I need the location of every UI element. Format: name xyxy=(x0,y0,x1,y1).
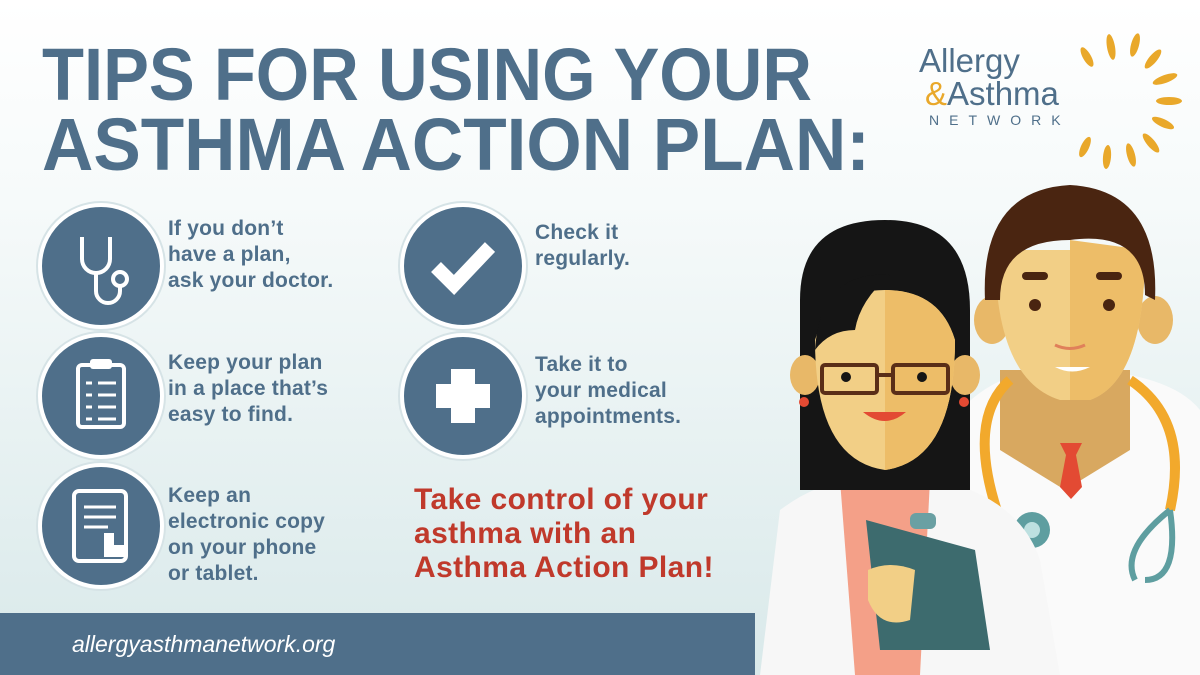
title: TIPS FOR USING YOUR xyxy=(42,33,812,116)
tip 1: ask your doctor. xyxy=(168,269,333,292)
tip 1 xyxy=(168,217,333,292)
woman xyxy=(760,220,1060,675)
tip 2: easy to find. xyxy=(168,403,293,426)
tip 2: in a place that’s xyxy=(168,377,328,400)
icon: tablet xyxy=(38,463,164,589)
tip 3: on your phone xyxy=(168,536,316,559)
tip 5 xyxy=(535,353,681,428)
tip 5: Take it to xyxy=(535,353,628,376)
logo: &Asthma xyxy=(925,75,1060,112)
tip 3: or tablet. xyxy=(168,562,259,585)
tip 2: Keep your plan xyxy=(168,351,322,374)
icon: cross xyxy=(400,333,526,459)
man xyxy=(960,185,1200,675)
footer bar: allergyasthmanetwork.org xyxy=(72,631,335,657)
tip 1: have a plan, xyxy=(168,243,291,266)
tip 4: regularly. xyxy=(535,247,630,270)
tip 3: electronic copy xyxy=(168,510,325,533)
tip 3 xyxy=(168,484,325,585)
icon: clipboard xyxy=(38,333,164,459)
callout: Take control of your xyxy=(414,483,708,516)
tip 1: If you don’t xyxy=(168,217,284,240)
tip 4: Check it xyxy=(535,221,618,244)
logo xyxy=(919,33,1182,169)
logo: NETWORK xyxy=(929,112,1071,128)
callout: asthma with an xyxy=(414,517,636,550)
tip 2 xyxy=(168,351,328,426)
icon: stethoscope xyxy=(38,203,164,329)
icon: check xyxy=(400,203,526,329)
illustration: doctors xyxy=(760,185,1200,675)
footer bar xyxy=(0,613,755,675)
title: ASTHMA ACTION PLAN: xyxy=(42,103,870,186)
tip 5: appointments. xyxy=(535,405,681,428)
callout xyxy=(414,483,714,584)
tip 4 xyxy=(535,221,630,270)
tip 5: your medical xyxy=(535,379,667,402)
callout: Asthma Action Plan! xyxy=(414,551,714,584)
tip 3: Keep an xyxy=(168,484,251,507)
logo: Allergy xyxy=(919,42,1020,79)
title xyxy=(42,33,870,186)
